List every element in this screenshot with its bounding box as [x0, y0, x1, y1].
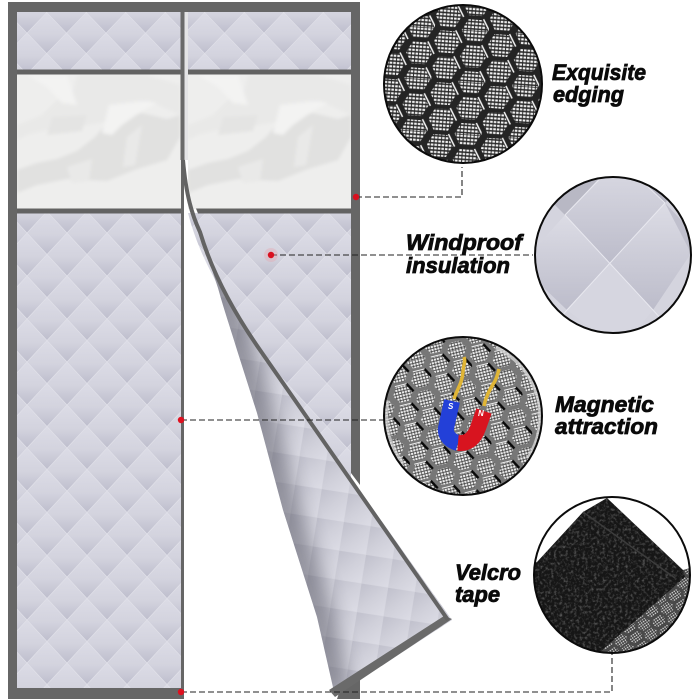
marker dot: velcro — [178, 689, 184, 695]
centre split seam — [180, 12, 184, 160]
label: Exquisite edging: edging — [553, 82, 625, 107]
dashed leader: magnetic attraction — [181, 419, 385, 421]
dashed leader: exquisite edging — [356, 167, 462, 197]
marker dot: edging — [353, 194, 359, 200]
label: Magnetic attraction: Magnetic — [555, 392, 654, 417]
left cross bars — [17, 70, 181, 214]
panel: right top quilted — [188, 12, 351, 70]
label: Windproof insulation: Windproof — [406, 230, 525, 255]
panel: left transparent window — [17, 74, 181, 209]
label: Windproof insulation — [406, 230, 525, 278]
right cross bars — [188, 70, 351, 214]
label: Exquisite edging — [552, 60, 646, 107]
icon: magnet — [446, 357, 499, 443]
label: Magnetic attraction: attraction — [555, 414, 658, 439]
label: Velcro tape: Velcro — [455, 560, 521, 585]
label: Velcro tape: tape — [455, 582, 500, 607]
seam pale strip — [184, 12, 188, 160]
label: Velcro tape — [455, 560, 521, 607]
curtain door — [8, 2, 452, 699]
label: Windproof insulation: insulation — [406, 253, 510, 278]
panel: right lower quilted — [188, 213, 351, 478]
flap bottom edging — [329, 616, 452, 697]
panel: right transparent window — [188, 74, 351, 209]
curtain frame edging — [8, 2, 360, 699]
circle: velcro tape detail — [533, 496, 691, 654]
dashed leader: velcro tape — [181, 654, 612, 692]
flap curved edging — [183, 160, 448, 620]
magnet pole N: N — [478, 409, 484, 418]
label: Exquisite edging: Exquisite — [552, 60, 646, 85]
marker dot: magnet — [178, 417, 184, 423]
marker dot: insulation — [264, 248, 278, 262]
panel: left lower quilted — [17, 213, 181, 689]
panel: left top quilted — [17, 12, 181, 70]
magnet pole S: S — [448, 402, 454, 411]
circle: edging mesh detail — [384, 5, 542, 163]
circle: quilted fabric detail — [534, 176, 692, 334]
dashed leader: windproof insulation — [271, 254, 533, 256]
folded flap back — [212, 270, 452, 688]
label: Magnetic attraction — [555, 392, 658, 439]
circle: magnetic attraction detail — [384, 337, 543, 495]
lower right frame corner — [337, 672, 360, 699]
